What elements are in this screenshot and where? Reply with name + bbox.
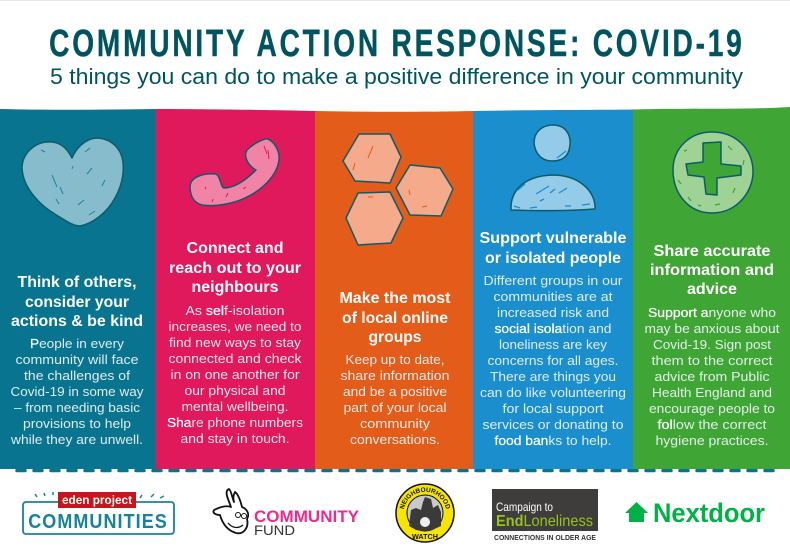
body text: and stay in touch. xyxy=(180,431,290,446)
icon: heart xyxy=(22,138,123,226)
body text: for local support xyxy=(502,401,604,416)
body text: may be anxious about xyxy=(644,321,780,336)
logo: eden project communities xyxy=(23,492,174,534)
heading: reach out to your xyxy=(169,260,301,277)
logo: campaign to end loneliness: Campaign to xyxy=(496,500,553,514)
body text: hygiene practices. xyxy=(656,433,768,448)
logo: campaign to end loneliness: CONNECTIONS IN OLDER AGE xyxy=(494,535,596,542)
body text: conversations. xyxy=(350,432,440,447)
heading: neighbours xyxy=(192,279,278,296)
icon: hexagons xyxy=(343,134,453,245)
icon: telephone xyxy=(190,139,279,206)
body text xyxy=(644,305,780,448)
body text: the challenges of xyxy=(24,368,130,383)
body text: As self-isolation xyxy=(186,303,284,318)
body text: can do like volunteering xyxy=(480,385,626,400)
logo: community fund: FUND xyxy=(254,522,295,538)
logo: community fund: COMMUNITY xyxy=(254,507,360,526)
heading: Make the most xyxy=(340,290,450,307)
heading xyxy=(650,243,774,298)
body text: Health England and xyxy=(652,385,772,400)
body text: community xyxy=(360,416,431,431)
heading: of local online xyxy=(342,310,448,327)
body text: provisions to help xyxy=(23,416,131,431)
body text: follow the correct xyxy=(658,417,767,432)
heading: Share accurate xyxy=(654,243,771,260)
heading xyxy=(480,230,627,267)
body text: find new ways to stay xyxy=(169,335,302,350)
body text xyxy=(10,336,144,447)
logo: eden project communities: COMMUNITIES xyxy=(28,511,167,533)
heading: Support vulnerable xyxy=(480,230,627,247)
body text: connected and check xyxy=(168,351,302,366)
body text xyxy=(340,352,450,447)
subtitle: 5 things you can do to make a positive difference in your community xyxy=(50,64,744,89)
body text: social isola tion and xyxy=(494,321,612,336)
heading: actions & be kind xyxy=(11,313,143,330)
body text: increased risk and xyxy=(497,305,609,320)
logo: nextdoor: Nextdoor xyxy=(653,498,765,528)
icon: medical cross xyxy=(673,132,753,213)
logo: neighbourhood watch: WATCH xyxy=(412,534,438,541)
body text: Covid-19 in some way xyxy=(10,384,144,399)
icon: person xyxy=(511,125,595,211)
panel: connect and reach out xyxy=(156,109,315,469)
dashed hand-drawn divider xyxy=(17,469,775,472)
body text: part of your local xyxy=(344,400,447,415)
logo: community fund xyxy=(213,489,360,538)
body text: People in every xyxy=(30,336,125,351)
body text: Support a nyone who xyxy=(648,305,776,320)
body text: services or donating to xyxy=(482,417,624,432)
panel: support vulnerable people xyxy=(473,110,633,469)
heading: Think of others, xyxy=(18,274,136,291)
body text: Different groups in our xyxy=(484,273,623,288)
body text: encourage people to xyxy=(649,401,775,416)
body text: Share phone numbers xyxy=(167,415,304,430)
body text: Keep up to date, xyxy=(346,352,444,367)
logo: neighbourhood watch xyxy=(395,483,455,543)
body text: Covid-19. Sign post xyxy=(653,337,771,352)
body text: community will face xyxy=(16,352,138,367)
body text: mental wellbeing. xyxy=(182,399,288,414)
body text: share information xyxy=(340,368,450,383)
heading: information and xyxy=(650,262,774,279)
body text: communities are at xyxy=(494,289,613,304)
body text: loneliness are key xyxy=(499,337,608,352)
body text xyxy=(167,303,304,446)
body text: and be a positive xyxy=(343,384,447,399)
title: COMMUNITY ACTION RESPONSE: COVID-19 xyxy=(49,23,742,65)
heading: groups xyxy=(368,329,422,346)
body text: advice from Public xyxy=(654,369,770,384)
logo: campaign to end loneliness: EndLoneliness xyxy=(496,513,593,530)
heading xyxy=(11,274,143,330)
body text: while they are unwell. xyxy=(10,432,143,447)
heading: Connect and xyxy=(186,240,284,257)
logo: campaign to end loneliness xyxy=(492,489,598,542)
heading xyxy=(340,290,450,346)
body text: them to the correct xyxy=(652,353,773,368)
body text: increases, we need to xyxy=(168,319,302,334)
heading: or isolated people xyxy=(485,250,621,267)
logo: neighbourhood watch: NEIGHBOURHOOD xyxy=(400,487,450,509)
logo: eden project communities: eden project xyxy=(62,495,132,507)
panel: share accurate information xyxy=(633,107,790,469)
body text: There are things you xyxy=(490,369,616,384)
heading xyxy=(169,240,301,296)
heading: consider your xyxy=(25,294,129,311)
body text: in on one another for xyxy=(170,367,300,382)
panel: local online groups xyxy=(315,111,473,469)
heading: advice xyxy=(687,281,737,298)
body text: – from needing basic xyxy=(14,400,141,415)
body text xyxy=(480,273,626,448)
panel: think of others xyxy=(0,109,156,469)
body text: concerns for all ages. xyxy=(488,353,618,368)
body text: food ban ks to help. xyxy=(494,433,612,448)
body text: our physical and xyxy=(184,383,286,398)
